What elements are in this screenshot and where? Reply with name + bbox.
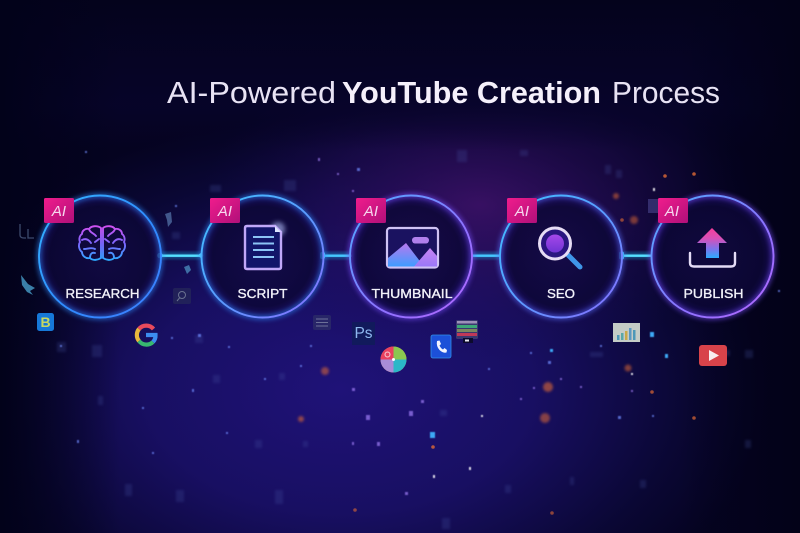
- research label: RESEARCH: [66, 286, 140, 301]
- floating icon: quote glyph: [165, 212, 172, 227]
- icon: brain: [79, 226, 125, 260]
- connector: thumbnail to seo: [471, 253, 501, 258]
- title: YouTube Creation: [342, 76, 601, 110]
- floating icon: layered list: [456, 320, 478, 343]
- AI badge: AI: [217, 203, 232, 220]
- floating icon: bar chart tile: [613, 323, 640, 342]
- title: AI-Powered: [167, 76, 336, 110]
- AI badge: AI: [363, 203, 378, 220]
- connector: seo to publish: [619, 252, 652, 260]
- publish ring: [652, 196, 774, 318]
- faint particle blocks: [57, 150, 753, 529]
- seo ring: [500, 196, 622, 318]
- floating icon: magnifier tile: [173, 288, 191, 304]
- floating icon: menu tile: [313, 315, 331, 330]
- AI badge: AI: [664, 203, 679, 220]
- seo label: SEO: [547, 286, 575, 301]
- floating icon: Photoshop tile: [352, 322, 375, 345]
- AI badge: AI: [51, 203, 66, 220]
- glowing orange bokeh: [298, 172, 696, 515]
- step: seo: [500, 196, 622, 318]
- small particles: [60, 151, 780, 495]
- floating icon: hook outline: [20, 224, 34, 238]
- step: thumbnail: [350, 196, 472, 318]
- script ring: [202, 196, 324, 318]
- floating icon: Photoshop tile: Ps: [354, 325, 373, 342]
- step: script: [202, 196, 324, 318]
- floating icon: B tile: B: [40, 314, 51, 330]
- floating icon: B tile: [37, 313, 54, 331]
- icon: upload arrow: [690, 228, 735, 266]
- title: [167, 76, 720, 110]
- floating icon: phone tile: [431, 335, 451, 358]
- thumbnail ring: [350, 196, 472, 318]
- icon: document: [245, 222, 285, 269]
- thumbnail label: THUMBNAIL: [372, 286, 452, 301]
- step: research: [39, 196, 161, 318]
- floating icon: small pin: [184, 265, 191, 274]
- icon: magnifier: [540, 228, 580, 267]
- floating icon: colour wheel: [380, 346, 406, 372]
- research ring: [39, 196, 161, 318]
- floating icon: Google G: [137, 326, 156, 345]
- icon: image thumbnail: [387, 228, 438, 268]
- step: publish: [648, 196, 774, 318]
- title: Process: [612, 76, 720, 110]
- connector: research to script: [157, 253, 203, 258]
- floating icon: satellite: [21, 275, 35, 295]
- AI badge: AI: [514, 203, 529, 220]
- script label: SCRIPT: [238, 286, 288, 301]
- floating icon: YouTube play: [699, 345, 727, 366]
- connector: script to thumbnail: [320, 252, 352, 259]
- ghost square behind badge: [648, 199, 660, 213]
- publish label: PUBLISH: [684, 286, 744, 301]
